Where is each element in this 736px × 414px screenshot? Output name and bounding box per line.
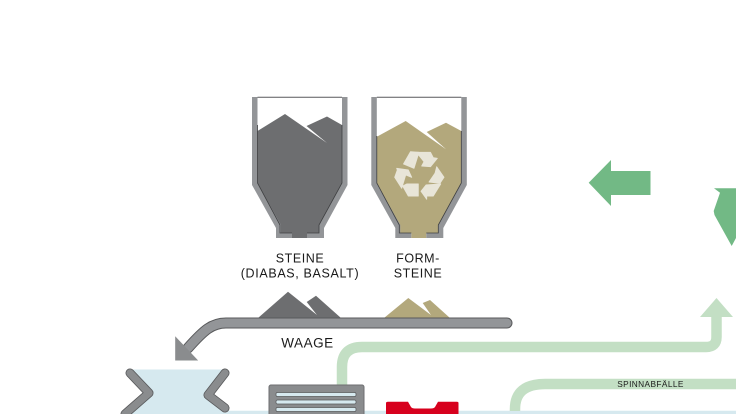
silo: stones (252, 97, 348, 238)
red unit (386, 402, 458, 414)
scale conveyor arrow (176, 323, 507, 360)
stone fill (258, 114, 342, 238)
silo wall (252, 97, 348, 238)
silo rim (258, 96, 342, 98)
mixer water band (122, 370, 736, 414)
label: scale: WAAGE (281, 336, 334, 350)
filter unit (269, 385, 364, 414)
label: shaped stones (394, 252, 442, 280)
label: shaped stones: STEINE (394, 266, 442, 280)
spinning waste line: SPINNABFÄLLE (617, 379, 684, 389)
silo: shaped stones (371, 97, 467, 238)
stone pile (258, 292, 341, 318)
silo inner outline (377, 131, 461, 233)
green arrow left (589, 160, 650, 206)
label: stones (241, 252, 359, 280)
shaped stone fill (377, 121, 461, 238)
silo wall (371, 97, 467, 238)
shaped stone pile (384, 298, 450, 318)
green arrow cropped right (714, 188, 736, 246)
spinning waste line (515, 379, 736, 411)
green recycling line (342, 298, 733, 386)
label: stones: (DIABAS, BASALT) (241, 266, 359, 280)
icon: recycling symbol (395, 152, 444, 199)
label: shaped stones: FORM- (396, 252, 440, 266)
mixer inlet left (125, 373, 149, 414)
silo inner outline (258, 125, 342, 233)
label: stones: STEINE (276, 252, 324, 266)
mixer inlet right (208, 373, 225, 408)
silo rim (377, 96, 461, 98)
